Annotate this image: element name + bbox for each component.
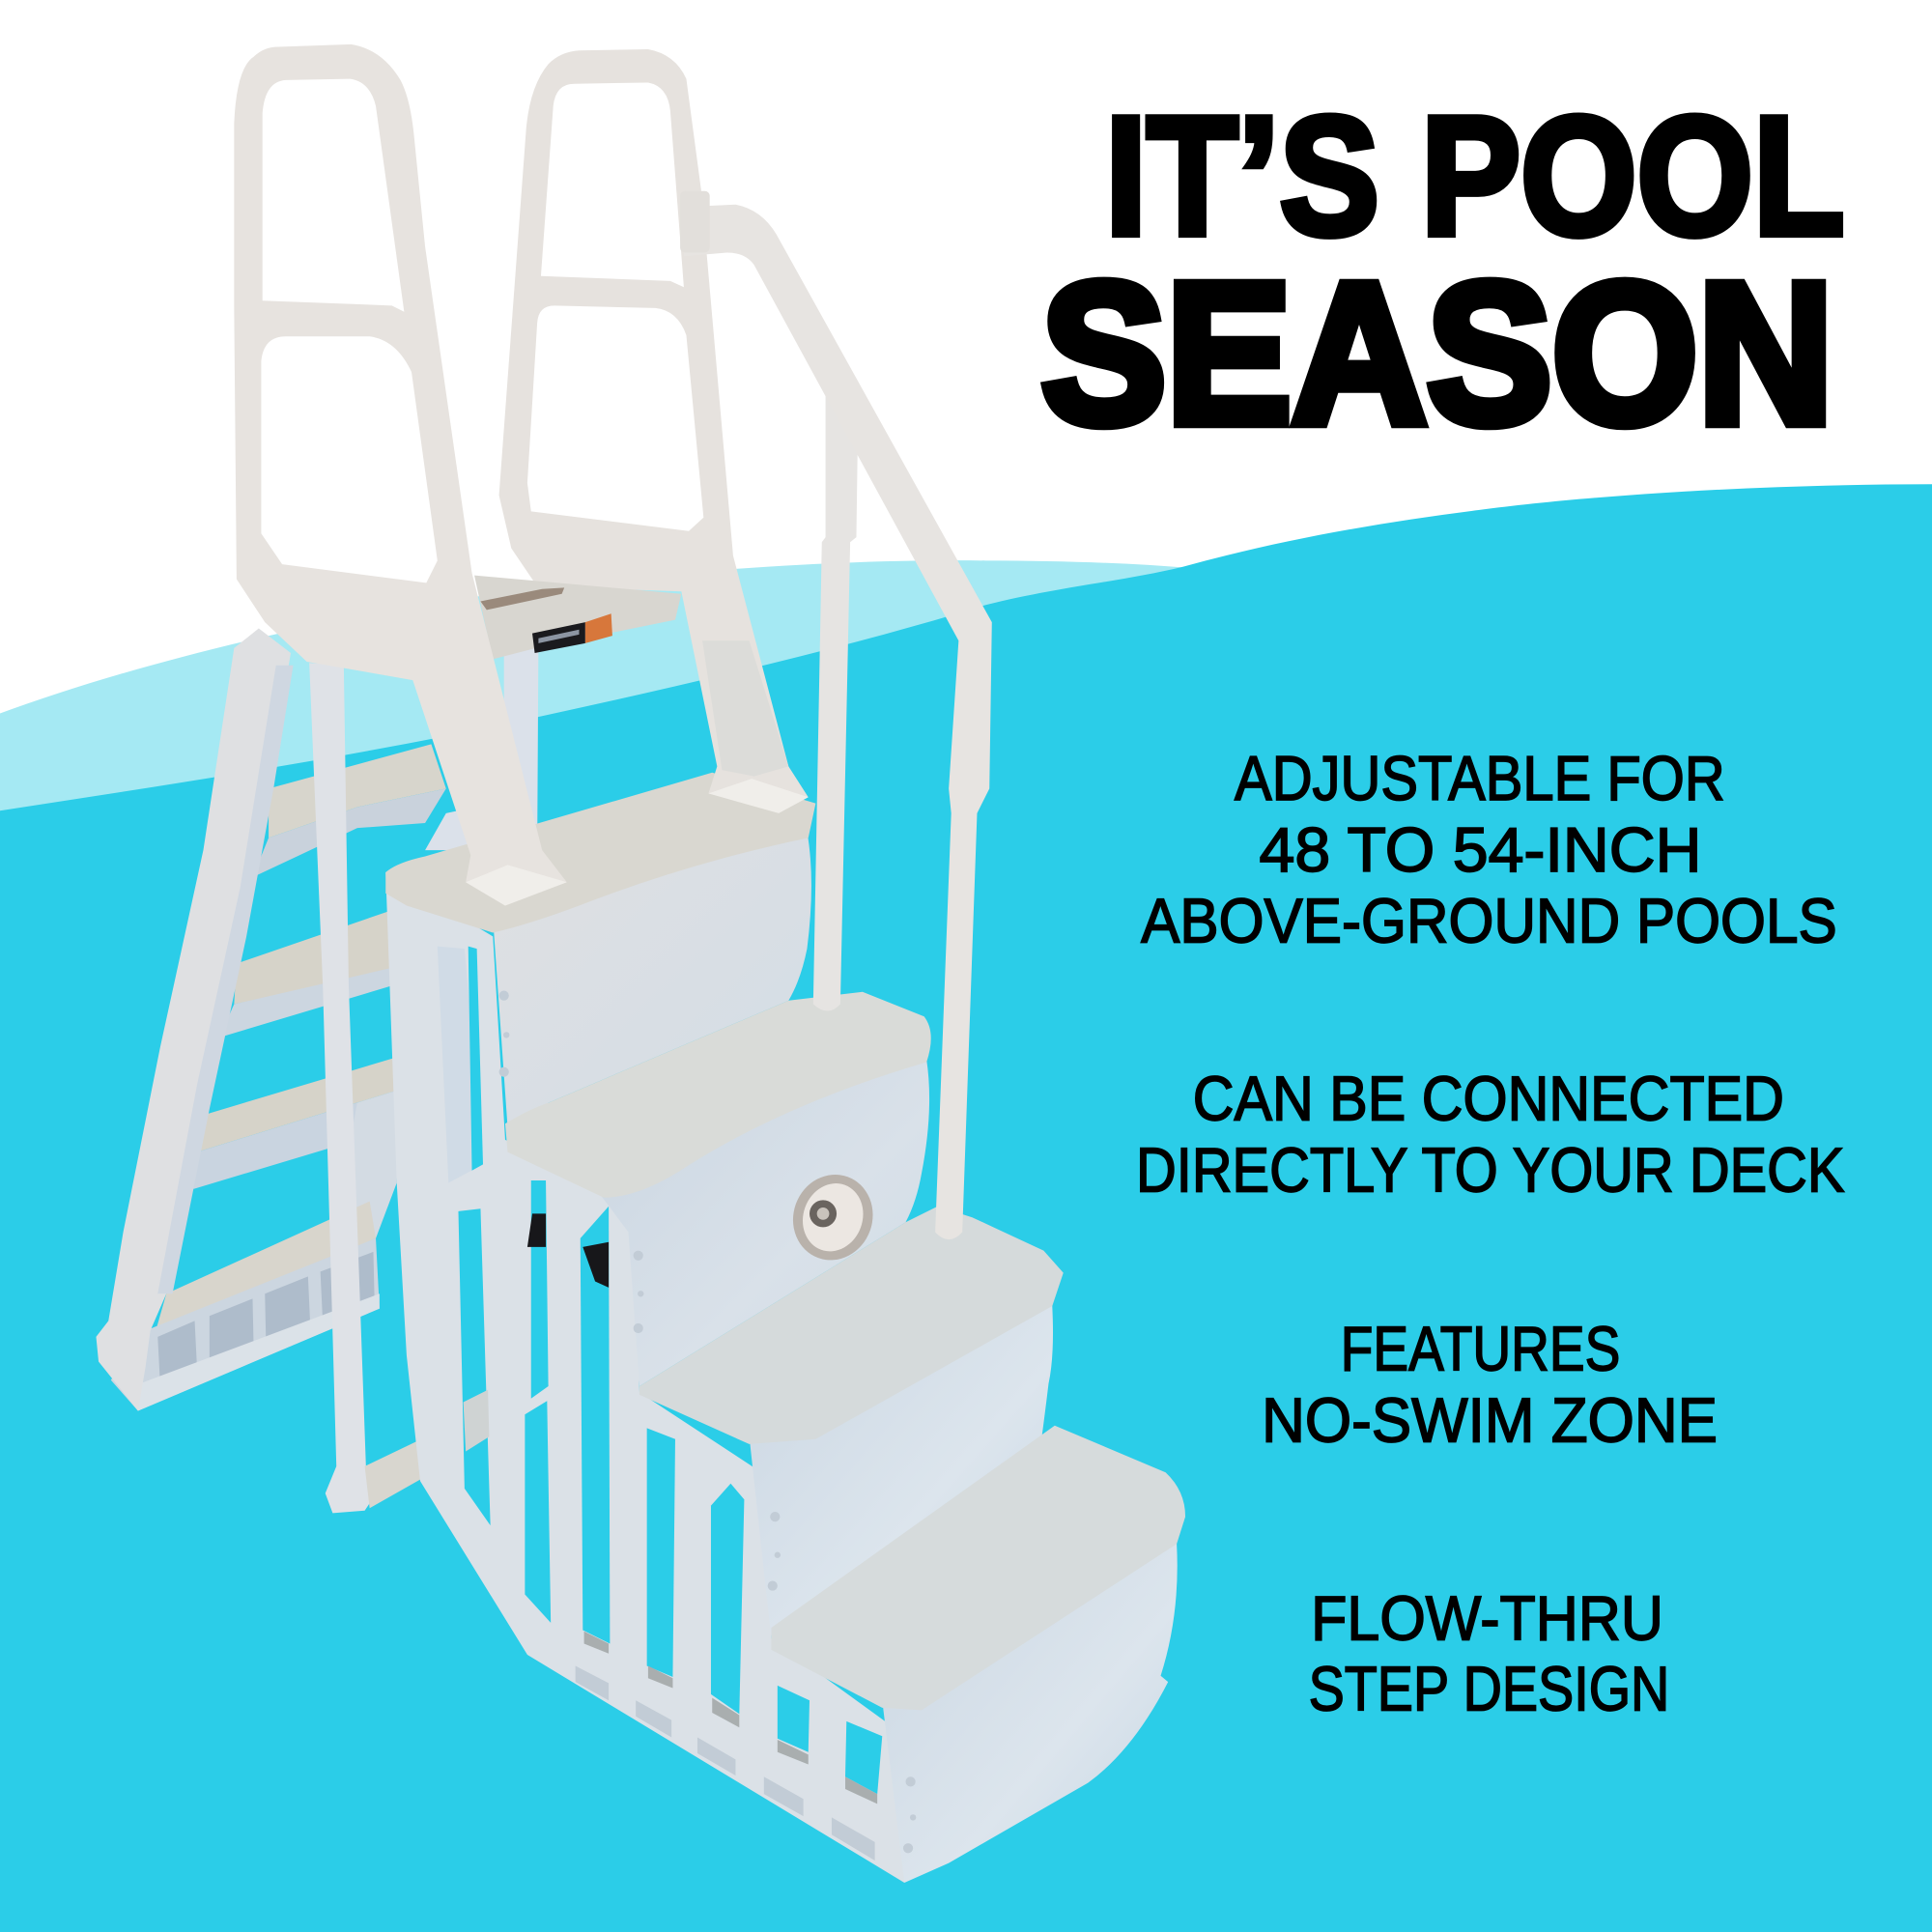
side panel adjustment holes: [499, 991, 916, 1853]
cross bar through opening: [464, 1390, 489, 1452]
background: main water wave: [0, 484, 1932, 1932]
feature: adjustable height: 48 TO 54-INCH: [1260, 814, 1701, 885]
riser four: [882, 1534, 1178, 1883]
feature: no-swim zone: [1262, 1313, 1718, 1455]
side panel openings: [458, 1180, 882, 1794]
heading: It's pool season: [1041, 82, 1844, 467]
upper column slot: [438, 947, 483, 1182]
riser three: [750, 1293, 1053, 1638]
heading: It's pool season: SEASON: [1041, 242, 1833, 466]
warning label: [480, 587, 612, 653]
black latch brackets: [527, 1213, 609, 1288]
right hand frame: [499, 49, 809, 810]
feature: flow-thru steps: [1309, 1583, 1669, 1723]
product: pool ladder and steps: [96, 44, 1185, 1883]
heading: It's pool season: IT’S POOL: [1105, 82, 1844, 270]
stair side panel: [385, 872, 924, 1883]
vertical rail post: [813, 382, 858, 1011]
right frame mount plate: [708, 779, 809, 813]
rail collar at frame: [680, 191, 710, 252]
feature: deck connection: CAN BE CONNECTED: [1193, 1063, 1784, 1133]
rear ladder brace: [157, 666, 294, 1293]
bottom vent slots: [576, 1632, 877, 1861]
rear ladder leg: [96, 629, 291, 1410]
background: light water wave: [0, 560, 1189, 863]
feature: flow-thru steps: FLOW-THRU: [1311, 1583, 1663, 1654]
long front post: [309, 663, 382, 1513]
riser two: [591, 1041, 929, 1386]
tread four: [771, 1426, 1185, 1710]
left hand frame: [234, 44, 567, 906]
feature: deck connection: DIRECTLY TO YOUR DECK: [1136, 1134, 1844, 1205]
right frame leg shading: [702, 640, 788, 777]
feature: flow-thru steps: STEP DESIGN: [1309, 1653, 1669, 1723]
feature: deck connection: [1136, 1063, 1844, 1205]
feature: adjustable height: [1141, 743, 1837, 956]
pool jet fitting: [781, 1163, 885, 1271]
feature: no-swim zone: FEATURES: [1341, 1313, 1620, 1383]
tread two: [505, 992, 931, 1198]
feature: no-swim zone: NO-SWIM ZONE: [1262, 1384, 1718, 1455]
long hand rail: [684, 205, 992, 1239]
centre support post: [425, 640, 538, 850]
rear ladder base: [111, 1238, 380, 1410]
tread one: [385, 773, 815, 933]
feature: adjustable height: ABOVE-GROUND POOLS: [1141, 886, 1837, 956]
tread three: [639, 1207, 1064, 1444]
base cross bars: [365, 1380, 547, 1508]
feature: adjustable height: ADJUSTABLE FOR: [1235, 743, 1725, 813]
left frame mount plate: [466, 865, 567, 906]
top platform: [474, 576, 681, 659]
rear ladder rungs: [154, 744, 446, 1337]
riser one: [493, 832, 811, 1127]
